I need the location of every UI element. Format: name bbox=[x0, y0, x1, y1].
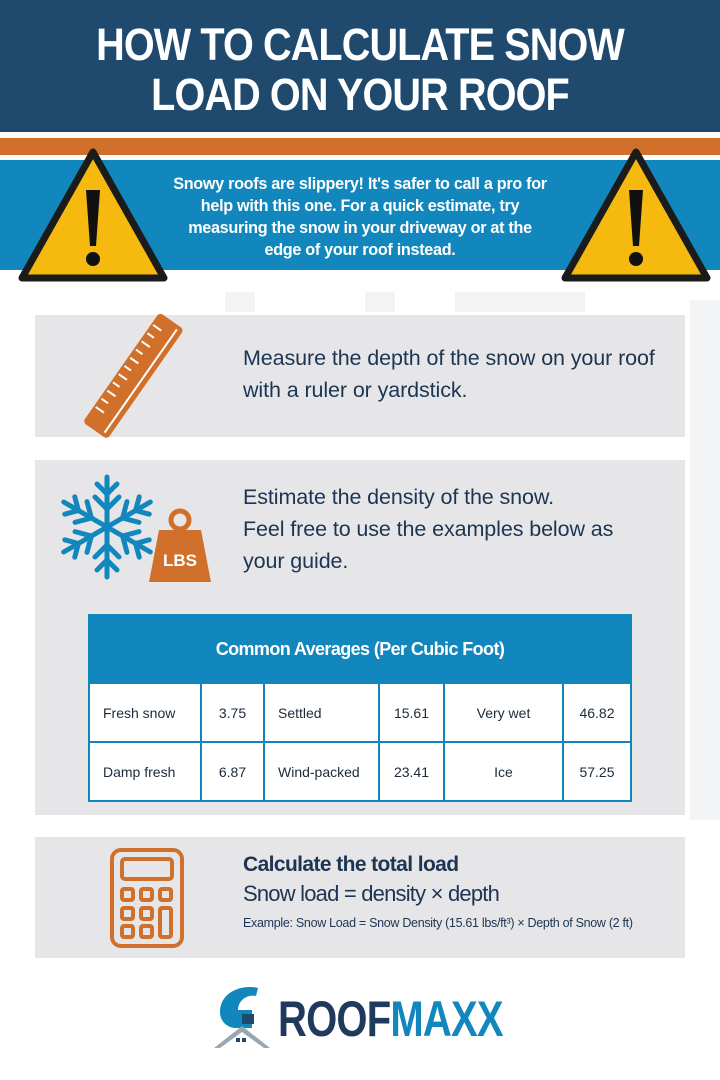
warning text: Snowy roofs are slippery! It's safer to call a pro for bbox=[173, 175, 547, 193]
table: common averages: 15.61 bbox=[394, 704, 429, 720]
table: common averages: Fresh snow bbox=[103, 704, 175, 720]
logo bbox=[214, 987, 504, 1048]
warning band bbox=[0, 160, 720, 270]
title: LOAD ON YOUR ROOF bbox=[151, 69, 569, 120]
icon: warning right bbox=[562, 148, 710, 282]
icon: ruler bbox=[84, 314, 182, 438]
background squares bbox=[225, 292, 255, 312]
icon: helmet bbox=[214, 987, 270, 1048]
panel: measure bbox=[35, 315, 685, 437]
panel: density bbox=[35, 460, 685, 815]
table: common averages bbox=[88, 614, 632, 802]
text: measure: Measure the depth of the snow on your roof bbox=[243, 346, 655, 370]
table: common averages: Damp fresh bbox=[103, 764, 175, 780]
table: common averages: 46.82 bbox=[579, 704, 615, 720]
table: common averages: 6.87 bbox=[219, 764, 246, 780]
panel: calculate bbox=[35, 837, 685, 958]
table: common averages: 57.25 bbox=[579, 764, 615, 780]
text: density: Feel free to use the examples below as bbox=[243, 517, 613, 541]
text: calculate: Snow load = density × depth bbox=[243, 881, 499, 906]
warning text: edge of your roof instead. bbox=[265, 241, 455, 259]
title: HOW TO CALCULATE SNOW bbox=[96, 19, 624, 70]
table: common averages: Ice bbox=[494, 764, 513, 780]
icon: snowflake bbox=[61, 474, 153, 580]
warning text bbox=[173, 175, 547, 259]
header bbox=[0, 0, 720, 132]
text: measure bbox=[243, 346, 655, 402]
table: common averages: 3.75 bbox=[219, 704, 246, 720]
text: measure: with a ruler or yardstick. bbox=[243, 378, 467, 402]
text: density: your guide. bbox=[243, 549, 348, 573]
table: common averages: Wind-packed bbox=[278, 764, 360, 780]
warning text: measuring the snow in your driveway or at the bbox=[188, 219, 532, 237]
text: density bbox=[243, 485, 613, 573]
icon: weight: LBS bbox=[163, 551, 197, 570]
table header bbox=[88, 614, 632, 682]
text: calculate bbox=[243, 853, 633, 930]
icon: warning left bbox=[18, 148, 168, 282]
table header: Common Averages (Per Cubic Foot) bbox=[216, 639, 504, 659]
text: ROOFMAXX: ROOFMAXX bbox=[278, 991, 503, 1047]
warning text: help with this one. For a quick estimate, try bbox=[201, 197, 519, 215]
table: common averages: Settled bbox=[278, 704, 322, 720]
title bbox=[96, 19, 625, 120]
table: common averages: Very wet bbox=[477, 704, 530, 720]
text: density: Estimate the density of the snow. bbox=[243, 485, 554, 509]
text: calculate: Calculate the total load bbox=[243, 853, 458, 876]
text: calculate: Example: Snow Load = Snow Density (15.61 lbs/ft³) × Depth of Snow (2 ft) bbox=[243, 916, 633, 930]
orange band bbox=[0, 138, 720, 155]
icon: calculator bbox=[110, 848, 184, 948]
table: common averages: 23.41 bbox=[394, 764, 429, 780]
icon: weight bbox=[149, 508, 211, 582]
